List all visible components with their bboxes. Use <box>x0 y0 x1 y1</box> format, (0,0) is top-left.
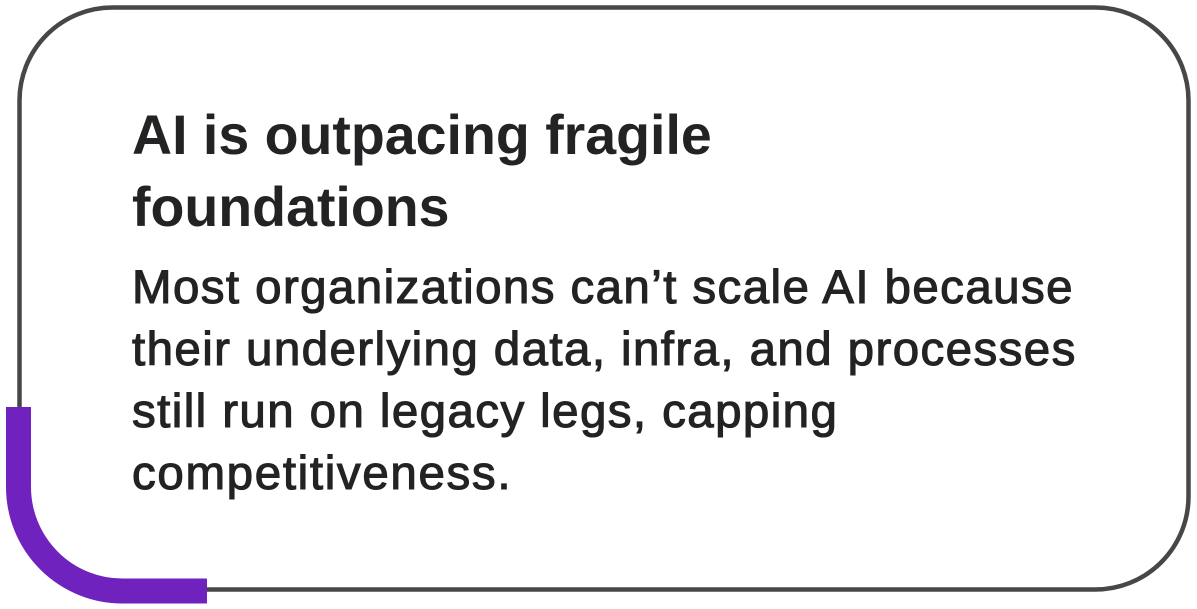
body text: competitiveness. <box>132 447 512 500</box>
body text: their underlying data, infra, and processes <box>132 323 1077 376</box>
heading: foundations <box>132 176 450 238</box>
body text <box>132 261 1077 500</box>
purple corner accent <box>18 407 207 591</box>
body text: still run on legacy legs, capping <box>132 385 838 438</box>
heading <box>132 104 712 238</box>
body text: Most organizations can’t scale AI because <box>132 261 1074 314</box>
heading: AI is outpacing fragile <box>132 104 712 166</box>
